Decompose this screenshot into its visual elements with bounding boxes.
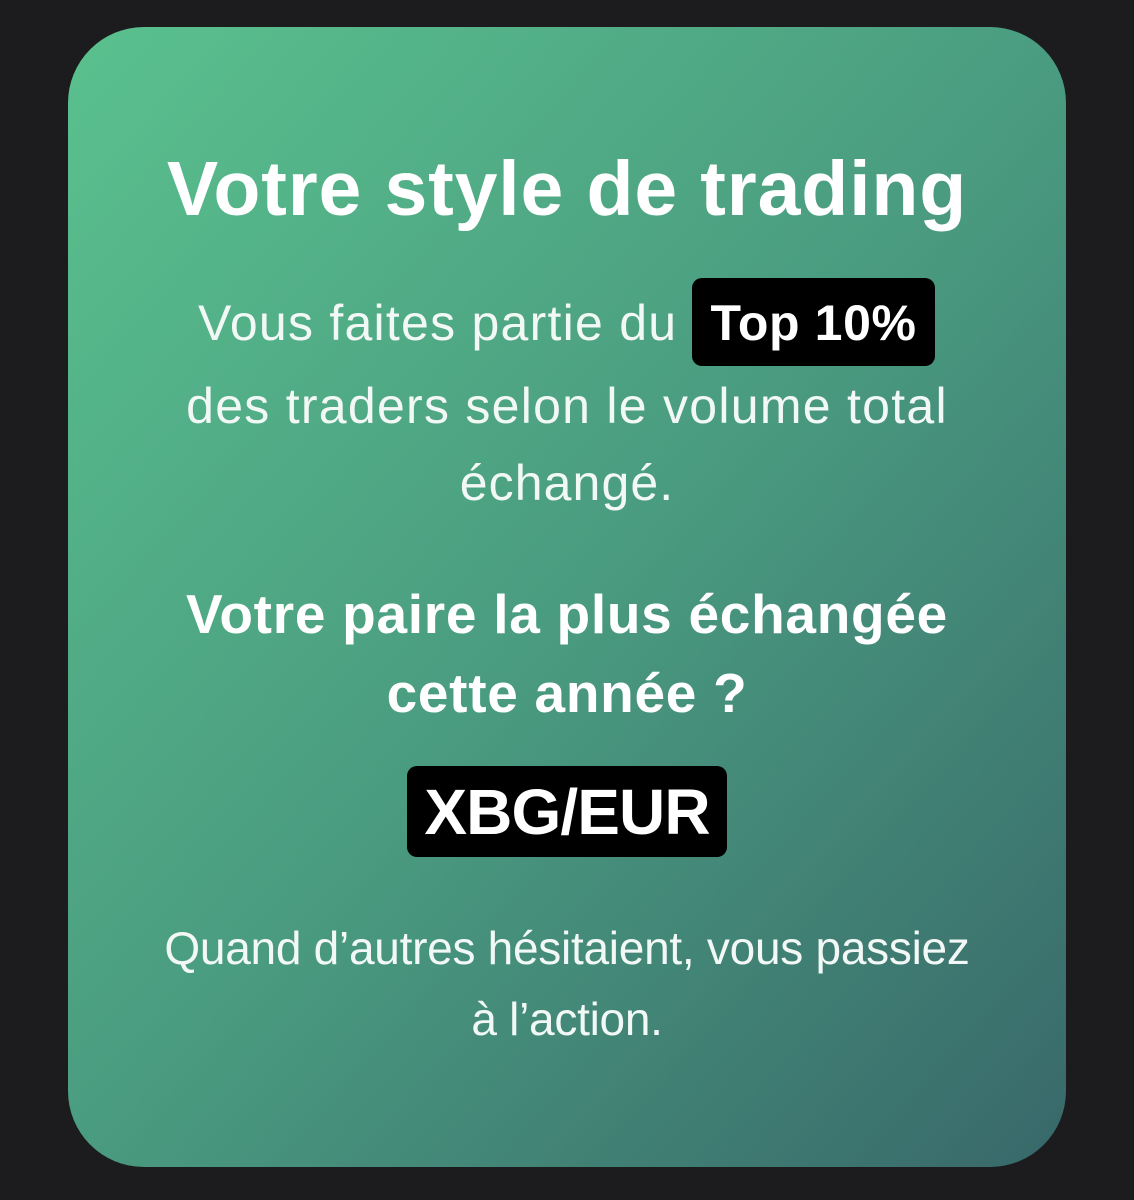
heading: most traded pair: Votre paire la plus échangée	[186, 583, 948, 645]
closing text	[164, 922, 970, 1045]
badge: Top 10%: Top 10%	[710, 295, 917, 351]
text block: top traders line 2: des traders selon le volume total	[186, 378, 948, 434]
title: Votre style de trading	[167, 146, 967, 232]
text block: top traders line 1: Vous faites partie du	[198, 295, 677, 351]
text block: top traders line 3: échangé.	[460, 455, 674, 511]
badge: XBG/EUR: XBG/EUR	[424, 776, 710, 848]
closing text: Quand d’autres hésitaient, vous passiez	[164, 922, 970, 974]
heading: most traded pair: cette année ?	[387, 662, 747, 724]
badge: Top 10%	[692, 278, 935, 366]
heading: most traded pair	[186, 583, 948, 724]
closing text: à l’action.	[471, 993, 663, 1045]
